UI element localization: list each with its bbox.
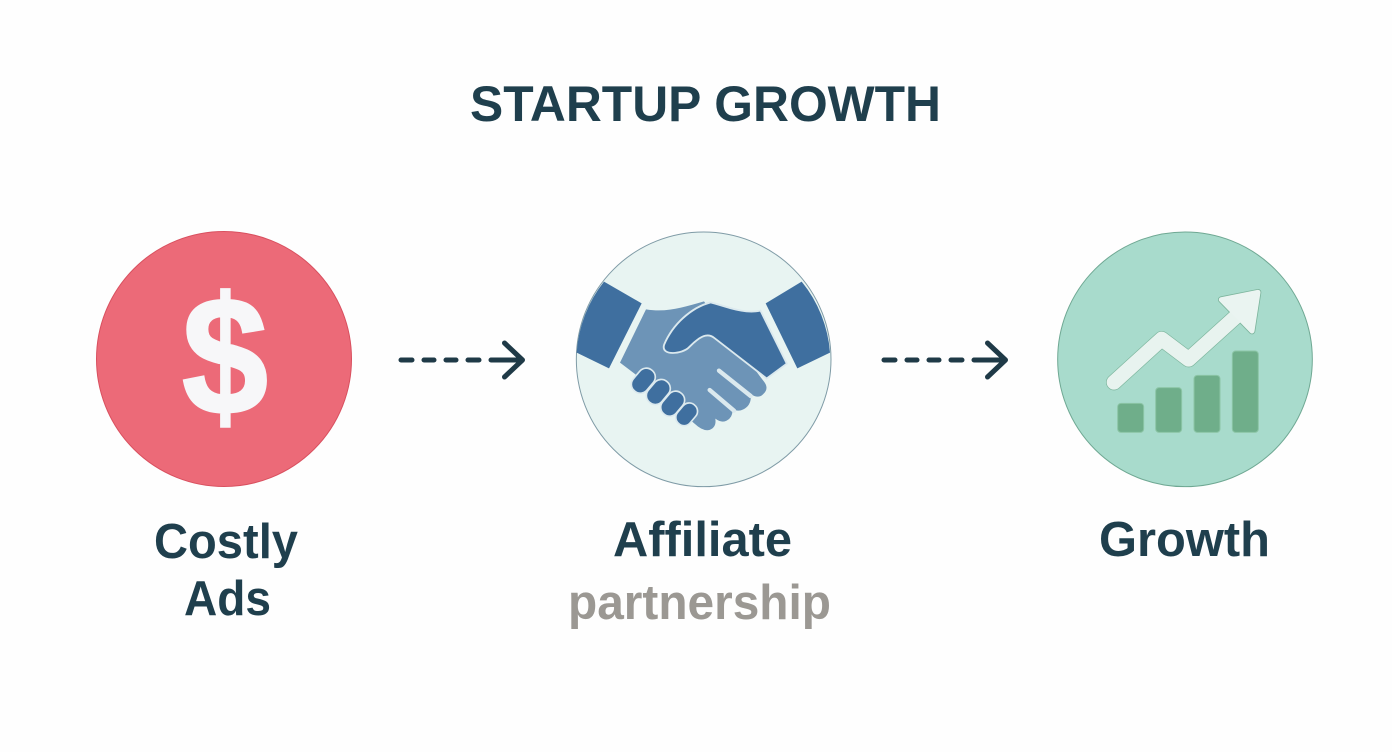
trend arrow [1114,292,1258,382]
right cuff [766,282,830,368]
left cuff [577,282,642,368]
knuckle fingers [629,366,700,428]
label: affiliate partnership [568,513,831,630]
step 3: growth [1058,232,1312,567]
label: costly ads: Ads [184,572,271,626]
label: costly ads: Costly [154,515,298,569]
bar chart [1118,351,1258,432]
label: costly ads [154,515,298,626]
icon: red circle with dollar sign [96,232,352,486]
icon: red circle with dollar sign: $ [182,263,268,450]
step 2: affiliate partnership [568,232,831,630]
title: STARTUP GROWTH [470,76,941,132]
light hand [620,301,767,430]
arrow: ads to partnership [401,343,522,377]
label: affiliate partnership: Affiliate [613,513,792,567]
dark hand [665,303,786,377]
arrow: partnership to growth [884,343,1006,377]
label: growth: Growth [1099,513,1270,567]
icon: growth chart circle [1058,232,1312,487]
icon: handshake circle [576,232,831,487]
label: affiliate partnership: partnership [568,576,831,630]
step 1: costly ads [96,232,352,626]
